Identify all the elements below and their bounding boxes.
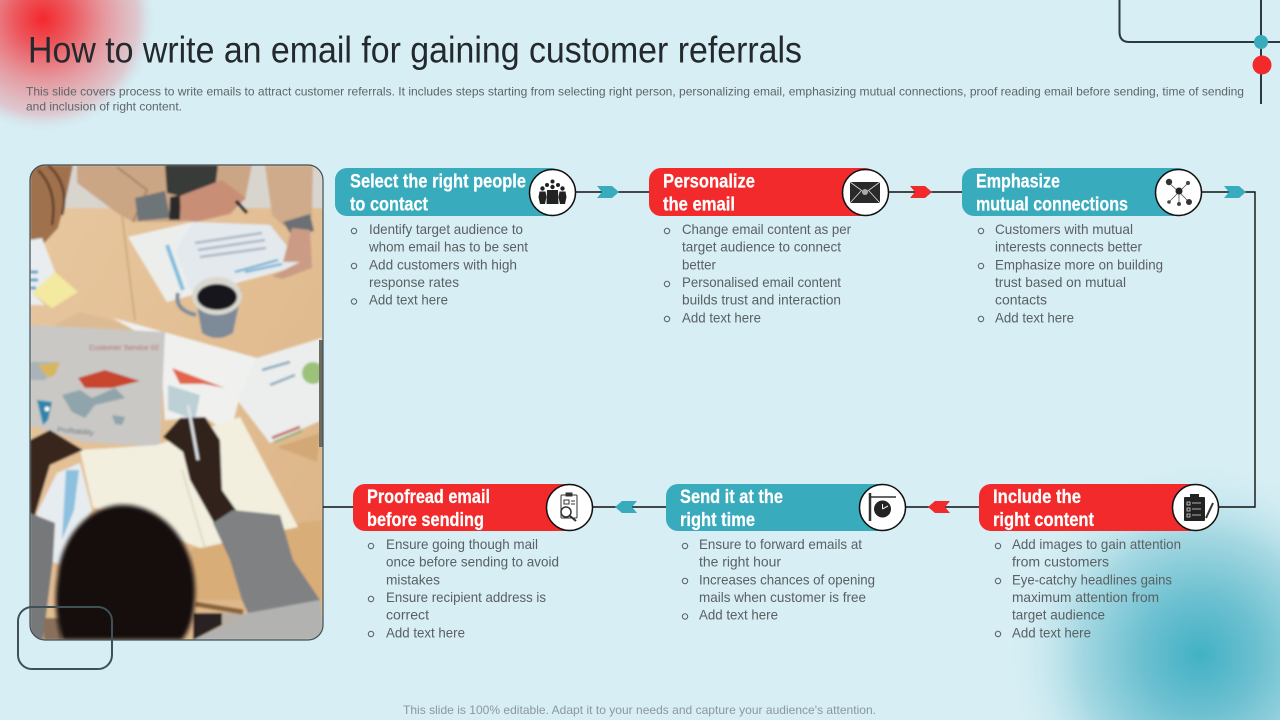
step 2 bullets: Add text here [682,309,761,325]
step 2 bullets: better [682,256,716,272]
wood darker front [190,520,323,600]
subtitle: This slide covers process to write emails to attract customer referrals. It includes steps starting from selecting right person, personalizing email, emphasizing mutual connections, proof reading email before sending, time of sending [26,85,1244,99]
step 1 bullets: whom email has to be sent [368,239,528,255]
step 6: include the right content: right content [993,510,1095,531]
step 6 bullets: Eye-catchy headlines gains [1012,571,1172,587]
step 3 bullets: Add text here [995,309,1074,325]
step 5: send it at the right time: right time [680,510,755,531]
report [128,222,302,302]
footer note: This slide is 100% editable. Adapt it to your needs and capture your audience's attention. [403,703,876,717]
step 1: select the right people: to contact [350,195,429,216]
step 6 bullets [995,536,1181,640]
step 2 bullets [664,221,851,325]
step 3 bullets: trust based on mutual [995,274,1126,290]
step 6 bullets: Add images to gain attention [1012,536,1181,552]
arrow: step 2 to 3 [910,186,932,198]
step 5: send it at the right time [666,484,906,531]
icon: envelope [850,182,880,203]
left hand [30,430,83,515]
step 6 bullets: target audience [1012,607,1105,623]
step 6 bullets: from customers [1012,554,1109,570]
connector path around steps [323,192,1255,507]
step 3 bullets: contacts [995,292,1047,308]
icon: network [1166,179,1192,206]
step 5 bullets [682,536,875,623]
step 1 bullets: Identify target audience to [369,221,523,237]
photo: meeting around a table [30,165,324,640]
top right decorative lines and dots [1120,0,1280,104]
step 5 bullets: Ensure to forward emails at [699,536,862,552]
step 3: emphasize mutual connections [962,168,1202,216]
step 5 bullets: mails when customer is free [699,589,866,605]
head [56,505,195,640]
arrow: step 3 to 6 [1224,186,1246,198]
step 2 bullets: Change email content as per [682,221,851,237]
step 4 bullets: Add text here [386,624,465,640]
left paper and sticky [30,238,55,305]
step 2 bullets: target audience to connect [682,239,841,255]
step 4: proofread email: before sending [367,510,484,531]
step 4: proofread email [353,484,592,531]
photo: meeting around a table: Profitability [57,425,94,437]
jacket [77,165,252,222]
step 2 bullets: Personalised email content [682,274,841,290]
step 5 bullets: Increases chances of opening [699,571,875,587]
sleeves [30,513,55,640]
step 3 bullets: Customers with mutual [995,221,1133,237]
arrow: step 1 to 2 [597,186,619,198]
subtitle [26,85,1244,113]
step 3 bullets [978,221,1163,325]
step 2: personalize the email: the email [663,195,735,216]
arrow: step 6 to 5 [928,501,950,513]
step 1 bullets: Add text here [369,292,448,308]
mug [177,293,196,315]
sleeve left [30,166,74,244]
icon: checklist with magnifier [561,493,577,521]
icon: hanging clock [869,493,896,521]
subtitle: and inclusion of right content. [26,99,182,113]
step 5: send it at the right time: Send it at the [680,487,783,508]
notebook [80,417,298,548]
step 1: select the right people [335,168,576,216]
icon: people group [538,180,566,204]
step 4 bullets: correct [386,607,429,623]
arrow: step 5 to 4 [615,501,637,513]
step 5 bullets: Add text here [699,607,778,623]
step 3 bullets: Emphasize more on building [995,256,1163,272]
step 6 bullets: Add text here [1012,624,1091,640]
step 4 bullets: Ensure going though mail [386,536,538,552]
step 1: select the right people: Select the right people [350,172,526,193]
step 6: include the right content: Include the [993,487,1081,508]
step 4 bullets: Ensure recipient address is [386,589,546,605]
step 1 bullets [351,221,528,308]
cardboard [59,314,124,328]
title: How to write an email for gaining customer referrals [28,29,802,70]
step 4 bullets [368,536,559,640]
writing hand [163,417,236,523]
icon: clipboard with pen [1184,494,1213,521]
map card [30,325,165,447]
step 2: personalize the email [649,168,888,216]
step 3: emphasize mutual connections: Emphasize [976,172,1060,193]
step 4 bullets: mistakes [386,571,440,587]
step 5 bullets: the right hour [699,554,781,570]
step 6: include the right content [979,484,1218,531]
photo: meeting around a table: Customer Service 02 [89,343,159,352]
rounded rectangle outline [18,607,112,669]
step 3 bullets: interests connects better [995,239,1142,255]
step 6 bullets: maximum attention from [1012,589,1159,605]
step 2: personalize the email: Personalize [663,172,755,193]
teal corner glow [1000,455,1280,720]
step 4 bullets: once before sending to avoid [386,554,559,570]
step 1 bullets: response rates [369,274,459,290]
step 3: emphasize mutual connections: mutual connections [976,195,1128,216]
bench [193,613,222,640]
left chart paper [37,463,92,565]
wood block [279,434,319,462]
step 2 bullets: builds trust and interaction [682,292,841,308]
step 1 bullets: Add customers with high [369,256,517,272]
step 4: proofread email: Proofread email [367,487,490,508]
red corner glow [0,0,170,140]
third paper [237,338,322,443]
second paper [113,318,257,435]
